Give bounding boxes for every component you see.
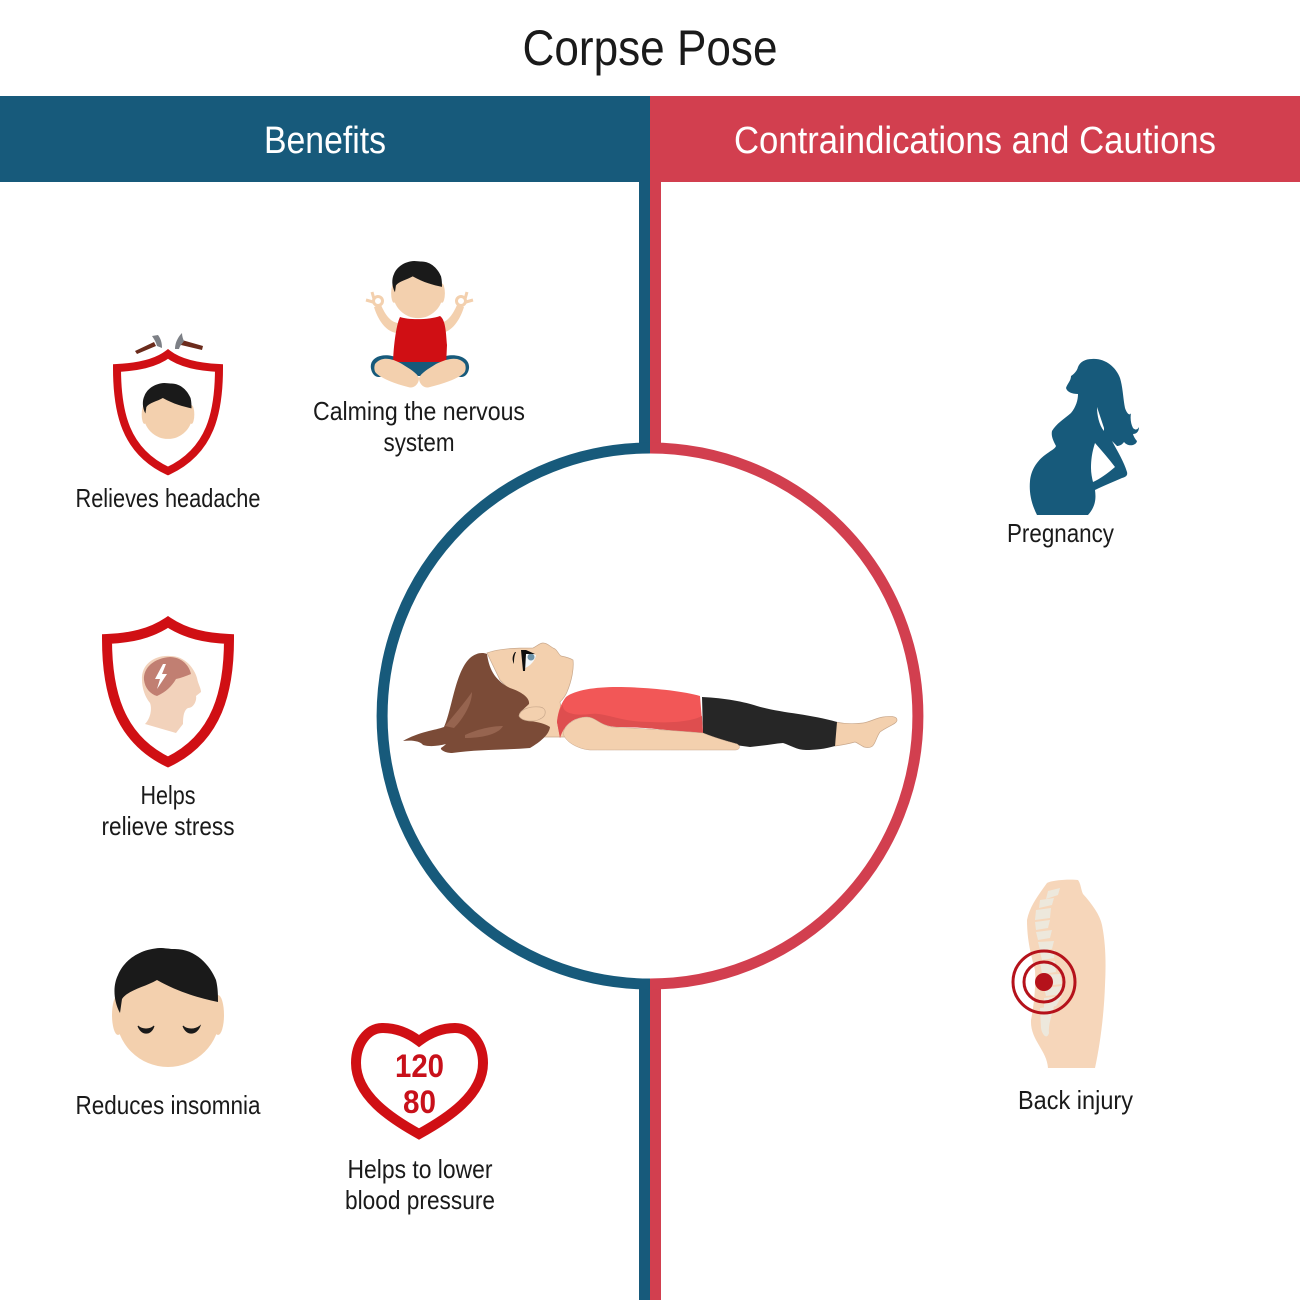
- icon: meditating child: [366, 261, 473, 387]
- icon: shield: [107, 622, 229, 762]
- ear: [519, 707, 545, 721]
- item: pregnancy: [1007, 359, 1139, 548]
- icon: head: [142, 383, 194, 439]
- header: benefits: Benefits: [264, 120, 386, 162]
- arms: [374, 305, 464, 333]
- header: contraindications and cautions: [650, 96, 1300, 182]
- arm: [563, 717, 739, 750]
- item: helps to lower blood pressure: [345, 1028, 495, 1215]
- item: helps relieve stress: [102, 622, 234, 841]
- blood pressure values: 80: [403, 1084, 436, 1120]
- hands: [366, 292, 473, 306]
- label: Relieves headache: [76, 483, 260, 513]
- icon: sleeping head: [112, 948, 224, 1067]
- figure: woman in corpse pose: [403, 643, 897, 753]
- eye: [513, 650, 536, 671]
- head and neck: [487, 643, 573, 737]
- label: Calming the nervous: [313, 396, 525, 426]
- item: relieves headache: [76, 333, 260, 513]
- label: system: [384, 427, 454, 457]
- header: contraindications and cautions: Contraindications and Cautions: [734, 120, 1216, 162]
- label: [313, 396, 525, 457]
- icon: spine: [1035, 888, 1063, 1036]
- label: blood pressure: [345, 1185, 495, 1215]
- icon: heart: [356, 1028, 483, 1134]
- label: relieve stress: [102, 811, 234, 841]
- legs shorts: [371, 355, 469, 377]
- shirt: [557, 687, 703, 738]
- label: Reduces insomnia: [76, 1090, 261, 1120]
- header: benefits: [0, 96, 650, 182]
- icon: torso: [1027, 880, 1106, 1068]
- label: [102, 780, 234, 841]
- label: Helps to lower: [348, 1154, 493, 1184]
- head: [391, 261, 445, 318]
- shorts front: [393, 362, 446, 375]
- central divider: [639, 182, 661, 1300]
- icon: pain target: [1013, 951, 1075, 1013]
- label: Back injury: [1018, 1085, 1133, 1115]
- icon: pregnant silhouette: [1030, 359, 1139, 515]
- item: calming the nervous system: [313, 261, 525, 457]
- foot: [835, 716, 897, 748]
- label: [345, 1154, 495, 1215]
- hair: [403, 653, 550, 753]
- blood pressure values: [395, 1048, 444, 1120]
- central circle: [382, 448, 918, 984]
- icon: hammers: [135, 333, 203, 354]
- tank top: [393, 316, 447, 366]
- label: Helps: [140, 780, 196, 810]
- blood pressure values: 120: [395, 1048, 444, 1084]
- icon: head with brain: [142, 656, 201, 733]
- title: Corpse Pose: [522, 20, 778, 76]
- crossed legs: [374, 359, 466, 387]
- leggings: [702, 697, 837, 750]
- icon: shield: [117, 354, 219, 471]
- item: back injury: [1013, 880, 1133, 1115]
- item: reduces insomnia: [76, 948, 261, 1120]
- label: Pregnancy: [1007, 518, 1114, 548]
